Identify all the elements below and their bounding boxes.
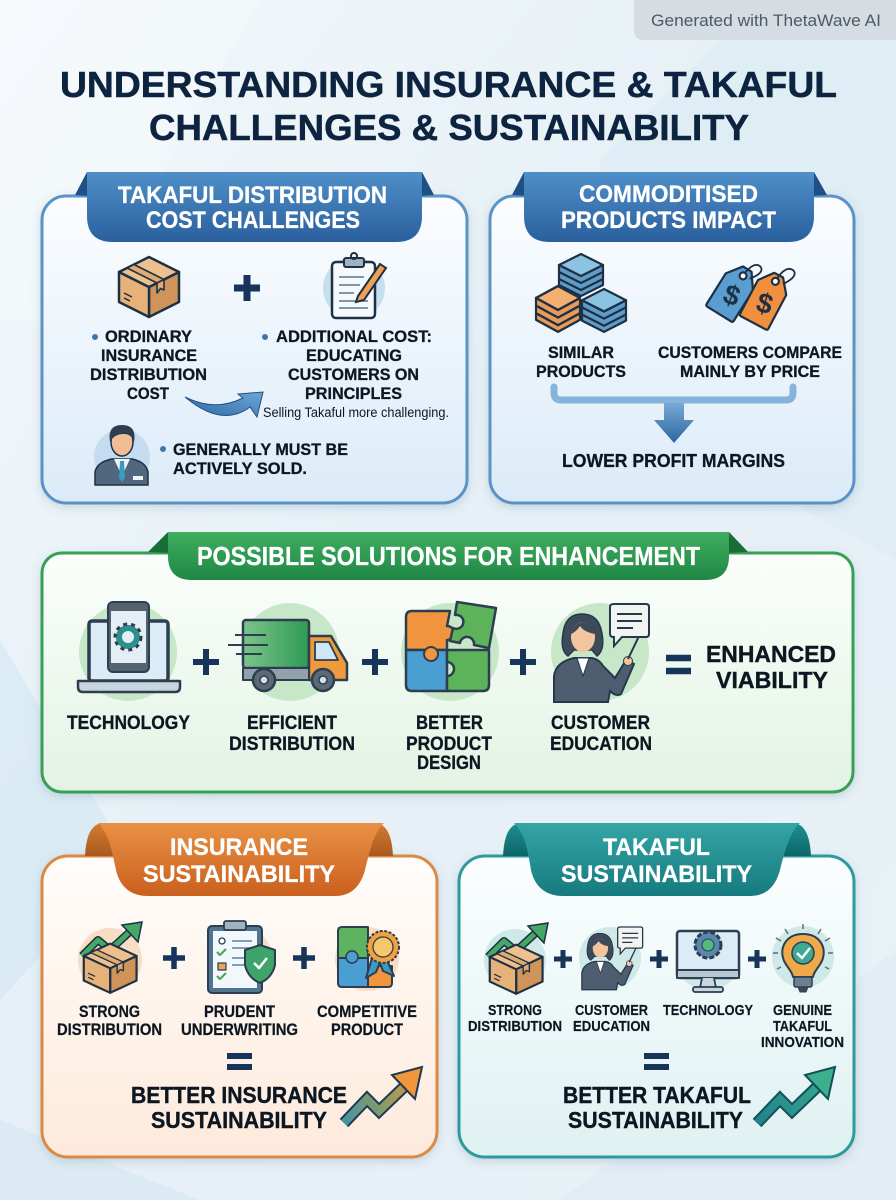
icon: box with growth arrow xyxy=(78,922,142,993)
heading ribbon: takaful distribution cost challenges: TAKAFUL DISTRIBUTION xyxy=(118,182,387,209)
heading ribbon: takaful distribution cost challenges xyxy=(75,172,434,242)
bullet text: ordinary insurance distribution cost: INSURANCE xyxy=(101,346,197,365)
label: similar products: PRODUCTS xyxy=(536,362,626,381)
label: technology: TECHNOLOGY xyxy=(663,1002,753,1019)
icon: monitor with gear xyxy=(677,929,739,992)
label: prudent underwriting: UNDERWRITING xyxy=(181,1020,298,1039)
result: better takaful sustainability: BETTER TAKAFUL xyxy=(563,1082,751,1108)
plus sign xyxy=(193,649,219,675)
result: enhanced viability: VIABILITY xyxy=(716,667,828,693)
bracket and down arrow xyxy=(554,387,793,443)
title: CHALLENGES & SUSTAINABILITY xyxy=(149,107,749,148)
panel: commoditised products impact xyxy=(490,172,854,503)
heading ribbon: possible solutions xyxy=(148,532,748,580)
panel: insurance sustainability xyxy=(42,823,437,1157)
label: technology: TECHNOLOGY xyxy=(67,713,190,734)
icon: rising trend arrow xyxy=(757,1067,835,1123)
label: efficient distribution: EFFICIENT xyxy=(247,713,337,734)
heading ribbon: possible solutions: POSSIBLE SOLUTIONS FOR ENHANCEMENT xyxy=(197,541,700,571)
conclusion: lower profit margins: LOWER PROFIT MARGINS xyxy=(562,451,785,471)
label: strong distribution: STRONG xyxy=(488,1002,542,1019)
icon: light bulb xyxy=(772,924,834,992)
plus sign xyxy=(510,649,536,675)
watermark tag xyxy=(634,0,896,40)
icon: cardboard box xyxy=(119,257,179,317)
heading ribbon: takaful sustainability xyxy=(503,823,811,896)
icon: box with growth arrow xyxy=(484,923,548,994)
label: genuine takaful innovation: INNOVATION xyxy=(761,1034,844,1051)
curved arrow xyxy=(185,392,263,417)
icon: rising trend arrow xyxy=(344,1067,422,1123)
icon: salesperson xyxy=(94,425,150,485)
heading ribbon: takaful sustainability: SUSTAINABILITY xyxy=(561,861,752,888)
heading ribbon: insurance sustainability: SUSTAINABILITY xyxy=(143,861,335,888)
label: customer education: CUSTOMER xyxy=(575,1002,648,1019)
label: customer education: EDUCATION xyxy=(573,1018,650,1035)
bullet text: generally must be actively sold xyxy=(160,440,348,478)
bullet text: ordinary insurance distribution cost xyxy=(90,327,207,403)
label: better product design: PRODUCT xyxy=(406,734,492,755)
equals sign xyxy=(644,1056,669,1067)
label: efficient distribution: DISTRIBUTION xyxy=(229,734,355,755)
icon: price tags: $ xyxy=(719,278,745,313)
equals sign xyxy=(666,658,691,671)
label: better product design xyxy=(406,713,492,774)
label: strong distribution xyxy=(468,1002,562,1035)
heading ribbon: takaful sustainability: TAKAFUL xyxy=(603,834,710,861)
result: better takaful sustainability xyxy=(563,1082,751,1133)
label: strong distribution: STRONG xyxy=(79,1002,140,1021)
plus sign xyxy=(163,947,185,969)
equals sign xyxy=(227,1056,252,1067)
bullet text: additional cost educating customers: ADDITIONAL COST: xyxy=(276,327,432,346)
plus sign xyxy=(362,649,388,675)
result: enhanced viability xyxy=(706,641,836,693)
label: strong distribution: DISTRIBUTION xyxy=(57,1020,162,1039)
icon: puzzle with medal xyxy=(335,927,399,991)
plus sign xyxy=(293,947,315,969)
title xyxy=(60,64,837,148)
bullet text: additional cost educating customers: Selling Takaful more challenging. xyxy=(263,405,449,420)
label: prudent underwriting: PRUDENT xyxy=(204,1002,276,1021)
label: customers compare mainly by price: MAINLY BY PRICE xyxy=(680,362,820,381)
label: competitive product: PRODUCT xyxy=(331,1020,404,1039)
icon: clipboard with pencil xyxy=(323,253,386,319)
bullet text: additional cost educating customers: PRINCIPLES xyxy=(305,384,402,403)
heading ribbon: commoditised products impact: COMMODITISED xyxy=(579,181,758,208)
label: prudent underwriting xyxy=(181,1002,298,1039)
label: competitive product: COMPETITIVE xyxy=(317,1002,417,1021)
icon: price tags: $ xyxy=(753,286,777,320)
label: strong distribution: DISTRIBUTION xyxy=(468,1018,562,1035)
icon: puzzle pieces xyxy=(401,602,499,701)
label: customers compare mainly by price: CUSTOMERS COMPARE xyxy=(658,343,842,362)
icon: price tags xyxy=(706,253,798,330)
heading ribbon: takaful distribution cost challenges: COST CHALLENGES xyxy=(146,207,360,234)
result: better insurance sustainability: BETTER INSURANCE xyxy=(131,1082,347,1108)
icon: teacher xyxy=(579,927,643,990)
result: enhanced viability: ENHANCED xyxy=(706,641,836,667)
result: better takaful sustainability: SUSTAINABILITY xyxy=(568,1107,743,1133)
label: better product design: BETTER xyxy=(416,713,483,734)
icon: laptop and phone with gear xyxy=(78,602,180,701)
bullet text: ordinary insurance distribution cost: ORDINARY xyxy=(105,327,193,346)
label: customers compare mainly by price xyxy=(658,343,842,381)
result: better insurance sustainability xyxy=(131,1082,347,1133)
icon: delivery truck xyxy=(228,603,347,701)
result: better insurance sustainability: SUSTAINABILITY xyxy=(151,1107,327,1133)
label: similar products xyxy=(536,343,626,381)
label: customer education: CUSTOMER xyxy=(551,713,650,734)
label: genuine takaful innovation xyxy=(761,1002,844,1051)
label: efficient distribution xyxy=(229,713,355,755)
icon: teacher with speech bubble xyxy=(551,603,649,702)
label: similar products: SIMILAR xyxy=(548,343,614,362)
label: genuine takaful innovation: GENUINE xyxy=(773,1002,832,1019)
bullet text: generally must be actively sold: ACTIVELY SOLD. xyxy=(173,459,307,478)
heading ribbon: commoditised products impact: PRODUCTS IMPACT xyxy=(561,207,776,234)
bullet text: ordinary insurance distribution cost: DISTRIBUTION xyxy=(90,365,207,384)
label: strong distribution xyxy=(57,1002,162,1039)
bullet text: additional cost educating customers: EDUCATING xyxy=(306,346,402,365)
title: UNDERSTANDING INSURANCE & TAKAFUL xyxy=(60,64,837,105)
heading ribbon: insurance sustainability: INSURANCE xyxy=(170,834,308,861)
label: customer education: EDUCATION xyxy=(550,734,652,755)
icon: stacked products xyxy=(536,254,626,332)
bullet text: ordinary insurance distribution cost: COST xyxy=(127,384,170,403)
watermark tag: Generated with ThetaWave AI xyxy=(651,11,881,30)
panel: takaful sustainability xyxy=(459,823,854,1157)
panel: takaful distribution cost challenges xyxy=(42,172,467,503)
plus sign xyxy=(650,950,668,968)
bullet text: additional cost educating customers: CUSTOMERS ON xyxy=(288,365,419,384)
plus sign xyxy=(554,950,572,968)
label: genuine takaful innovation: TAKAFUL xyxy=(773,1018,832,1035)
plus sign xyxy=(234,275,260,301)
panel: possible solutions for enhancement xyxy=(42,532,853,792)
label: customer education xyxy=(573,1002,650,1035)
plus sign xyxy=(748,950,766,968)
bullet text: additional cost educating customers xyxy=(262,327,449,420)
label: better product design: DESIGN xyxy=(417,753,481,774)
heading ribbon: insurance sustainability xyxy=(85,823,393,896)
icon: clipboard with shield xyxy=(208,921,275,993)
heading ribbon: commoditised products impact xyxy=(512,172,827,242)
bullet text: generally must be actively sold: GENERALLY MUST BE xyxy=(173,440,348,459)
label: customer education xyxy=(550,713,652,755)
label: competitive product xyxy=(317,1002,417,1039)
